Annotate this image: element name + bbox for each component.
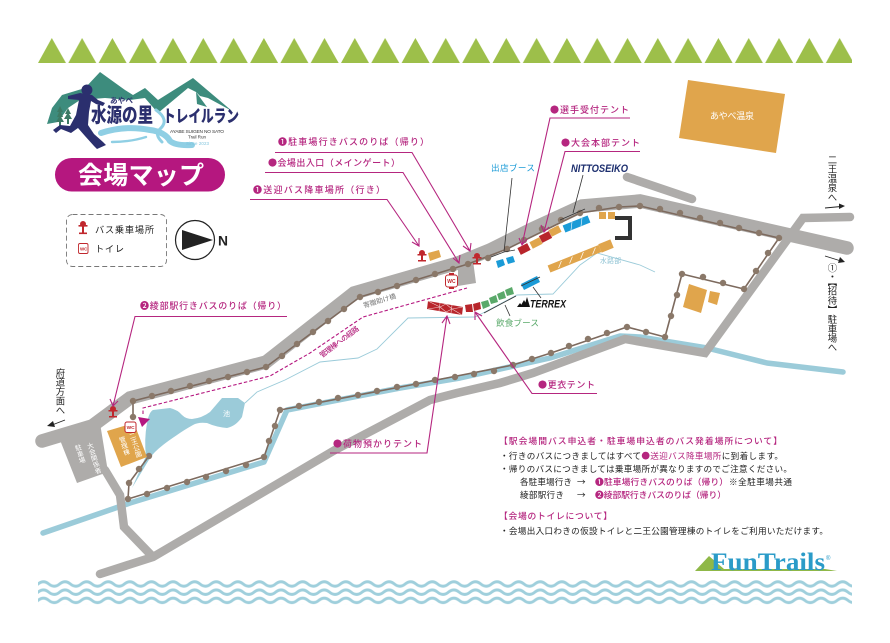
callout: baggage tent: ●荷物預かりテント <box>333 437 422 450</box>
callout: baggage tent <box>330 316 450 453</box>
exhibitor booths: lower row <box>549 239 614 269</box>
bus info line 1: ・行きのバスにつきましてはすべて●送迎バス降車場所に到着します。 <box>500 450 783 462</box>
FunTrails logo: FunTrails <box>711 549 825 576</box>
food booths <box>481 287 514 309</box>
compass north arrow: N <box>218 232 228 248</box>
south connector road <box>105 470 152 556</box>
bus info line 3: → <box>577 476 586 488</box>
booth label: food: 飲食ブース <box>496 317 539 328</box>
label: bridge: 寄贈助け橋 <box>362 291 397 310</box>
water channel stream <box>245 253 655 403</box>
callout: Ayabe station bus return <box>110 299 287 406</box>
logo runner <box>53 84 106 149</box>
callout: reception tent <box>519 103 630 245</box>
tent: headquarters <box>539 231 552 243</box>
information block: bus <box>499 434 792 501</box>
callout: shuttle drop off <box>250 183 419 246</box>
building: Nio park management <box>107 423 147 467</box>
direction label: Nio onsen: 二王温泉へ <box>826 155 838 202</box>
booth label: exhibitor <box>491 162 535 257</box>
toilet: gate: WC <box>447 279 456 285</box>
pond <box>132 398 245 488</box>
callout: Ayabe station bus return: ❷綾部駅行きバスのりば（帰り） <box>140 299 286 312</box>
callout: changing tent <box>475 312 597 394</box>
bus info line 3: ❶駐車場行きバスのりば（帰り） <box>595 475 728 488</box>
callout: main gate <box>265 156 460 263</box>
callout: parking bus return <box>275 135 471 251</box>
toilet info heading: 【会場のトイレについて】 <box>499 509 612 522</box>
bus info heading: 【駅会場間バス申込者・駐車場申込者のバス発着場所について】 <box>499 434 782 447</box>
building: Nio park management: 二王公園 <box>127 432 143 460</box>
logo romanized name: AYABE SUIGEN NO SATO <box>170 129 224 135</box>
trail course <box>125 203 782 502</box>
booth label: food <box>484 296 539 328</box>
road to parking <box>100 217 850 574</box>
label: route to management building: 管理棟への経路 <box>318 324 361 360</box>
callout: headquarters tent: ●大会本部テント <box>561 136 640 149</box>
direction label: parking <box>825 256 845 352</box>
callout: changing tent: ●更衣テント <box>538 378 595 391</box>
pond label: 池 <box>223 409 230 418</box>
stage bracket <box>615 218 630 238</box>
logo since: Since 2023 <box>186 141 210 146</box>
building: Nio park management: 管理棟 <box>116 434 131 458</box>
bus stop: parking return <box>472 253 482 264</box>
legend icon: bus stop <box>78 221 88 234</box>
bus info line 4: ❷綾部駅行きバスのりば（帰り） <box>595 488 726 501</box>
wave border <box>38 580 852 605</box>
bus info line 4: 綾部駅行き <box>520 489 564 501</box>
heading pill: 会場マップ <box>55 158 225 192</box>
toilet: management building <box>125 422 136 432</box>
bus stop: shuttle drop off <box>418 250 426 262</box>
sponsor: Terrex <box>517 277 567 310</box>
staff parking label line 2: 駐車場 <box>72 442 87 466</box>
logo trees <box>56 106 72 128</box>
heading pill: 会場マップ: 会場マップ <box>78 162 204 190</box>
exhibitor booth: Terrex <box>521 276 540 290</box>
buildings: east <box>683 284 720 313</box>
tents <box>427 212 615 315</box>
staff parking label: 大会関係者 <box>84 440 102 476</box>
gate stub <box>458 253 476 286</box>
staff parking lot <box>60 423 108 483</box>
building: Ayabe onsen: あやべ温泉 <box>710 110 754 121</box>
direction label: Nio onsen <box>825 155 845 209</box>
callout: headquarters tent <box>541 136 640 232</box>
toilet: gate <box>446 273 458 289</box>
branch road near Nittoseiko <box>627 177 692 199</box>
logo river <box>101 110 192 145</box>
callout: shuttle drop off: ❶送迎バス降車場所（行き） <box>253 183 385 196</box>
sponsor: Nittoseiko: NITTOSEIKO <box>571 163 628 175</box>
bus stops <box>108 250 482 418</box>
direction label: prefectural road <box>47 368 66 427</box>
direction label: prefectural road: 府道方面へ <box>54 368 66 415</box>
exhibitor booths: blue upper <box>564 218 589 230</box>
tent: changing <box>465 302 481 312</box>
direction label: parking: ①・【招待】駐車場へ <box>826 263 838 352</box>
FunTrails logo: ® <box>826 555 831 562</box>
mountain triangle border <box>38 38 852 63</box>
callout: reception tent: ●選手受付テント <box>550 103 629 116</box>
bus info line 4: → <box>577 489 586 501</box>
sponsor: Nittoseiko <box>560 163 628 220</box>
bus info line 3: ※全駐車場共通 <box>729 476 792 488</box>
booth label: exhibitor: 出店ブース <box>491 162 535 173</box>
legend label: toilet: トイレ <box>95 244 124 254</box>
river <box>43 336 843 533</box>
sponsor: Terrex: TERREX <box>530 298 567 310</box>
bus info line 3: 各駐車場行き <box>520 476 572 488</box>
callout: parking bus return: ❶駐車場行きバスのりば（帰り） <box>278 135 429 148</box>
toilet info line: ・会場出入口わきの仮設トイレと二王公園管理棟のトイレをご利用いただけます。 <box>500 525 828 537</box>
tent: baggage <box>427 301 463 315</box>
callout: main gate: ●会場出入口（メインゲート） <box>268 156 400 169</box>
bus info line 4 <box>520 488 726 501</box>
building: Ayabe onsen <box>679 80 785 153</box>
legend icon: toilet: WC <box>80 246 88 252</box>
logo title left: あやべ <box>110 95 134 105</box>
route to management building <box>138 288 467 427</box>
logo trail run: Trail Run <box>188 134 206 140</box>
legend <box>66 214 166 266</box>
bus stop: station return <box>108 406 118 418</box>
toilet: management building: WC <box>127 425 135 431</box>
tent: reception <box>517 243 531 255</box>
logo title right: トレイルラン <box>163 107 239 126</box>
label: water channel: 水路部 <box>600 256 621 265</box>
exhibitor booths: blue squares <box>496 256 515 268</box>
bus info line 2: ・帰りのバスにつきましては乗車場所が異なりますのでご注意ください。 <box>500 463 792 475</box>
logo title main: 水源の里 <box>91 104 153 127</box>
logo mountains <box>47 72 232 124</box>
bus info line 3 <box>520 475 792 488</box>
information block: toilet <box>499 509 828 537</box>
legend label: bus stop: バス乗車場所 <box>95 224 154 235</box>
compass north arrow <box>176 220 228 260</box>
main road <box>42 201 847 441</box>
event logo <box>47 72 239 149</box>
exhibitor booths: upper orange <box>428 212 615 261</box>
roads <box>42 177 850 574</box>
